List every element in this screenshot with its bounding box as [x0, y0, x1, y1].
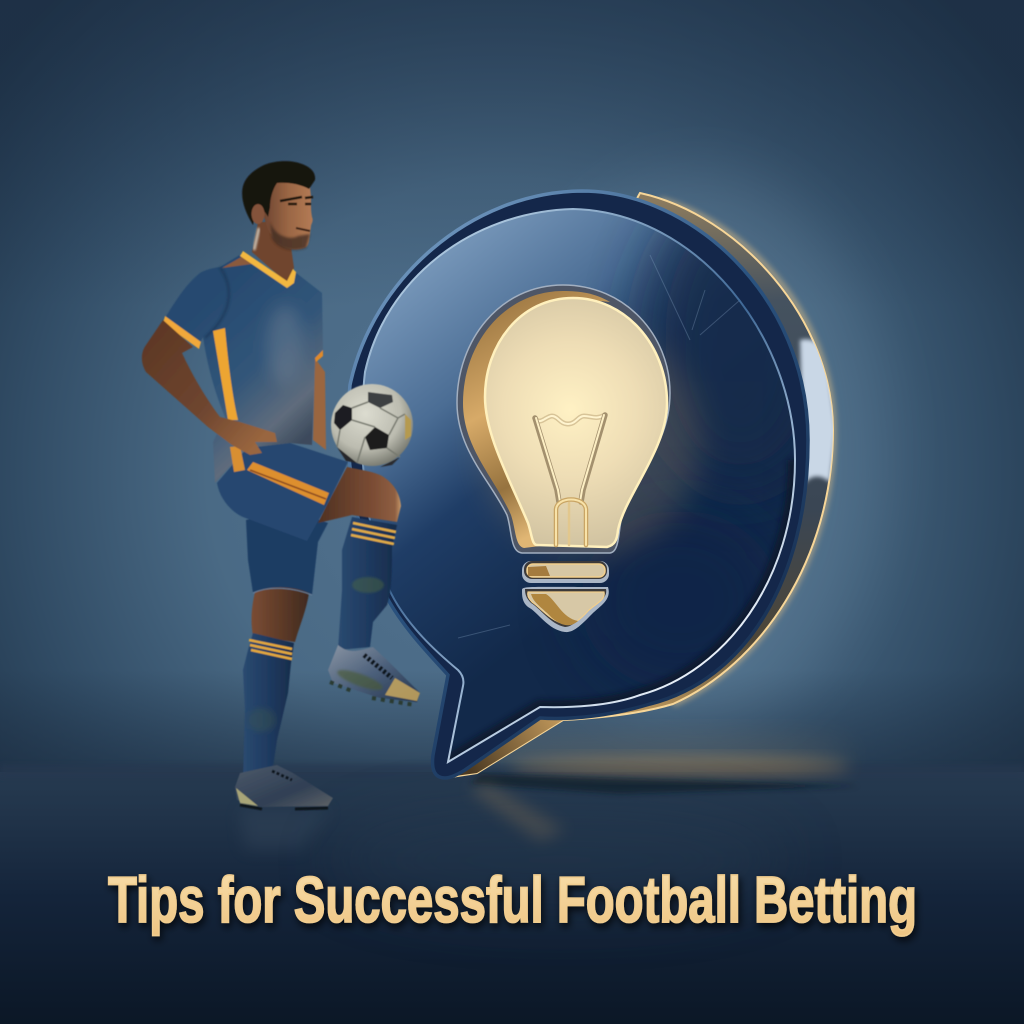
standing boot	[235, 765, 333, 809]
sleeve cuff	[163, 316, 201, 349]
bulb glass	[485, 298, 667, 547]
light bulb icon	[457, 285, 700, 632]
neck	[252, 222, 294, 283]
left arm and hand	[142, 320, 277, 455]
standing leg knee	[252, 587, 309, 642]
head	[242, 161, 315, 250]
glow behind bubble	[510, 170, 890, 730]
floor glow and reflections	[240, 757, 860, 910]
neck rim light	[254, 228, 259, 250]
right sleeve cuff	[315, 350, 323, 362]
ear	[252, 204, 264, 224]
bulb neon line	[485, 298, 667, 547]
standing sock	[243, 633, 294, 777]
bulb base tip	[522, 587, 609, 632]
raised boot	[328, 645, 420, 705]
outer gold glow	[660, 200, 833, 704]
filament	[535, 415, 605, 545]
bulb glow	[480, 325, 700, 555]
sleeve seam shadow	[205, 267, 229, 338]
face edge line	[362, 209, 795, 762]
collar	[240, 251, 296, 288]
bulb base ring	[522, 561, 609, 583]
beard shading	[270, 222, 310, 250]
speech bubble	[348, 190, 836, 778]
bubble tail underside	[455, 712, 563, 776]
shirt stripe	[213, 328, 238, 420]
face sheen	[450, 223, 794, 760]
lower shorts	[246, 510, 328, 595]
football	[331, 384, 413, 467]
hair	[242, 161, 315, 225]
football player	[142, 161, 420, 809]
right arm	[313, 358, 326, 450]
raised sock	[338, 517, 397, 650]
lips	[296, 228, 310, 231]
bubble front rim	[348, 191, 808, 778]
bubble face	[362, 209, 795, 762]
chest sheen	[267, 305, 303, 385]
shirt	[163, 253, 323, 483]
brows and eyes	[280, 197, 313, 201]
silver highlight on side	[800, 339, 836, 484]
bubble extrusion	[445, 193, 833, 778]
shirt shoulder patch	[222, 256, 252, 268]
bulb gold side	[463, 291, 610, 548]
lower shorts edge	[253, 588, 312, 595]
raised thigh	[318, 467, 401, 523]
bulb recess outline	[457, 285, 670, 553]
shorts	[217, 443, 348, 541]
